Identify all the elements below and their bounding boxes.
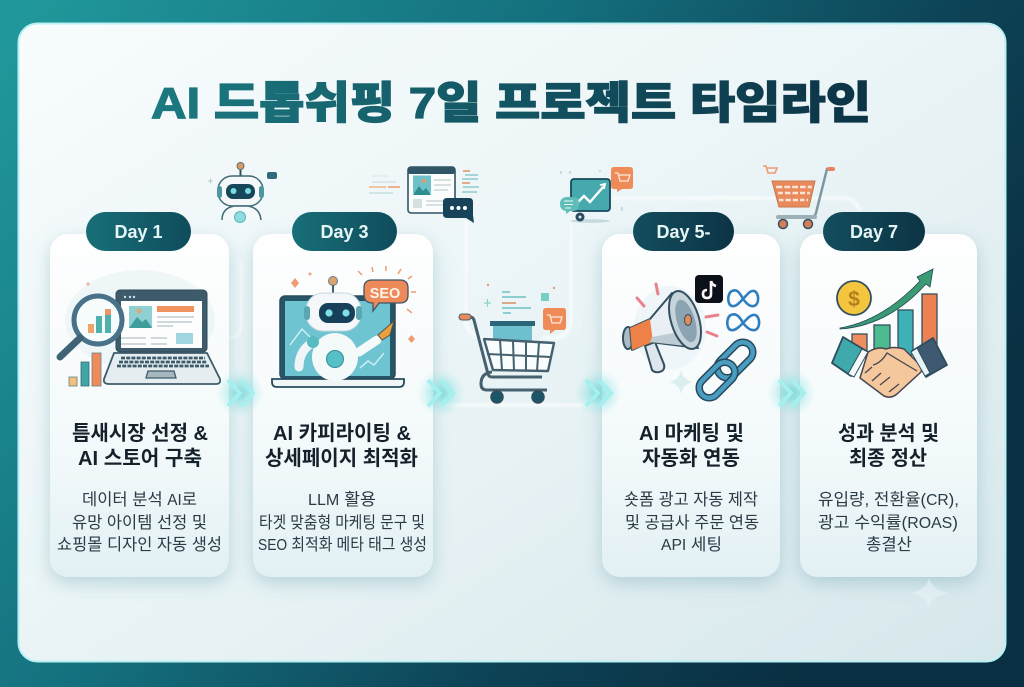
text: card 3: 및 공급사 주문 연동 <box>625 513 759 532</box>
text: card 1: 쇼핑몰 디자인 자동 생성 <box>57 535 222 554</box>
text: card 2 <box>258 490 427 554</box>
text: card 4: 광고 수익률(ROAS) <box>818 513 958 532</box>
heading: card 3: 자동화 연동 <box>642 447 740 470</box>
heading: card 4: 최종 정산 <box>849 447 927 470</box>
arrow: Day 3 to cart <box>417 369 465 417</box>
pill: Day 7: Day 7 <box>850 222 898 242</box>
text: card 4: 유입량, 전환율(CR), <box>818 490 959 509</box>
heading: card 1: AI 스토어 구축 <box>78 447 202 470</box>
connector lines <box>229 198 860 405</box>
decorative sparkle <box>910 578 948 608</box>
text: card 2: LLM 활용 <box>308 490 376 509</box>
icon: shopping cart center <box>459 284 566 403</box>
icon: orange cart top <box>763 166 835 228</box>
icon: laptop and magnifier <box>60 270 220 386</box>
icon: growth chart and handshake: $ <box>848 288 860 311</box>
text: card 2: SEO 최적화 메타 태그 생성 <box>258 535 427 554</box>
card: Day 5 <box>602 212 780 577</box>
heading: card 1 <box>72 422 208 470</box>
pill: Day 3 <box>292 212 397 251</box>
text: card 4: 총결산 <box>866 535 912 554</box>
pill: Day 1 <box>86 212 191 251</box>
heading: card 4: 성과 분석 및 <box>838 422 939 445</box>
pill: Day 5-: Day 5- <box>656 222 711 242</box>
title: AI 드롭쉬핑 7일 프로젝트 타임라인 <box>151 79 871 128</box>
text: card 1: 유망 아이템 선정 및 <box>72 513 207 532</box>
card: Day 1 <box>50 212 229 577</box>
arrow: cart to Day 5 <box>574 369 622 417</box>
heading: card 1: 틈새시장 선정 & <box>72 422 208 445</box>
heading: card 2: AI 카피라이팅 & <box>273 422 411 445</box>
arrow: Day 1 to Day 3 <box>216 369 264 417</box>
text: card 1 <box>57 490 222 554</box>
heading: card 3: AI 마케팅 및 <box>639 422 744 445</box>
pill: Day 1: Day 1 <box>114 222 163 242</box>
icon: growth chart and handshake <box>832 269 947 397</box>
arrow: Day 5 to Day 7 <box>767 369 815 417</box>
text: card 3 <box>624 490 759 554</box>
text: card 4 <box>818 490 959 554</box>
icon: robot laptop with SEO <box>272 266 416 387</box>
icon: chart and chat <box>560 167 633 223</box>
heading: card 2: 상세페이지 최적화 <box>265 447 418 470</box>
heading: card 2 <box>265 422 418 470</box>
icon: small robot <box>208 162 277 222</box>
heading: card 4 <box>838 422 939 470</box>
heading: card 3 <box>639 422 744 470</box>
pill: Day 7 <box>823 212 925 251</box>
text: card 3: API 세팅 <box>661 535 722 554</box>
icon: robot laptop with SEO: SEO <box>370 286 400 302</box>
text: card 1: 데이터 분석 AI로 <box>82 490 197 509</box>
icon: megaphone, TikTok, Meta, chain <box>623 275 759 402</box>
text: card 2: 타겟 맞춤형 마케팅 문구 및 <box>259 513 425 532</box>
pill: Day 5- <box>633 212 734 251</box>
card: Day 3 <box>253 212 433 577</box>
icon: web page window <box>369 167 479 223</box>
card: Day 7 <box>800 212 977 577</box>
text: card 3: 숏폼 광고 자동 제작 <box>624 490 758 509</box>
pill: Day 3: Day 3 <box>320 222 369 242</box>
